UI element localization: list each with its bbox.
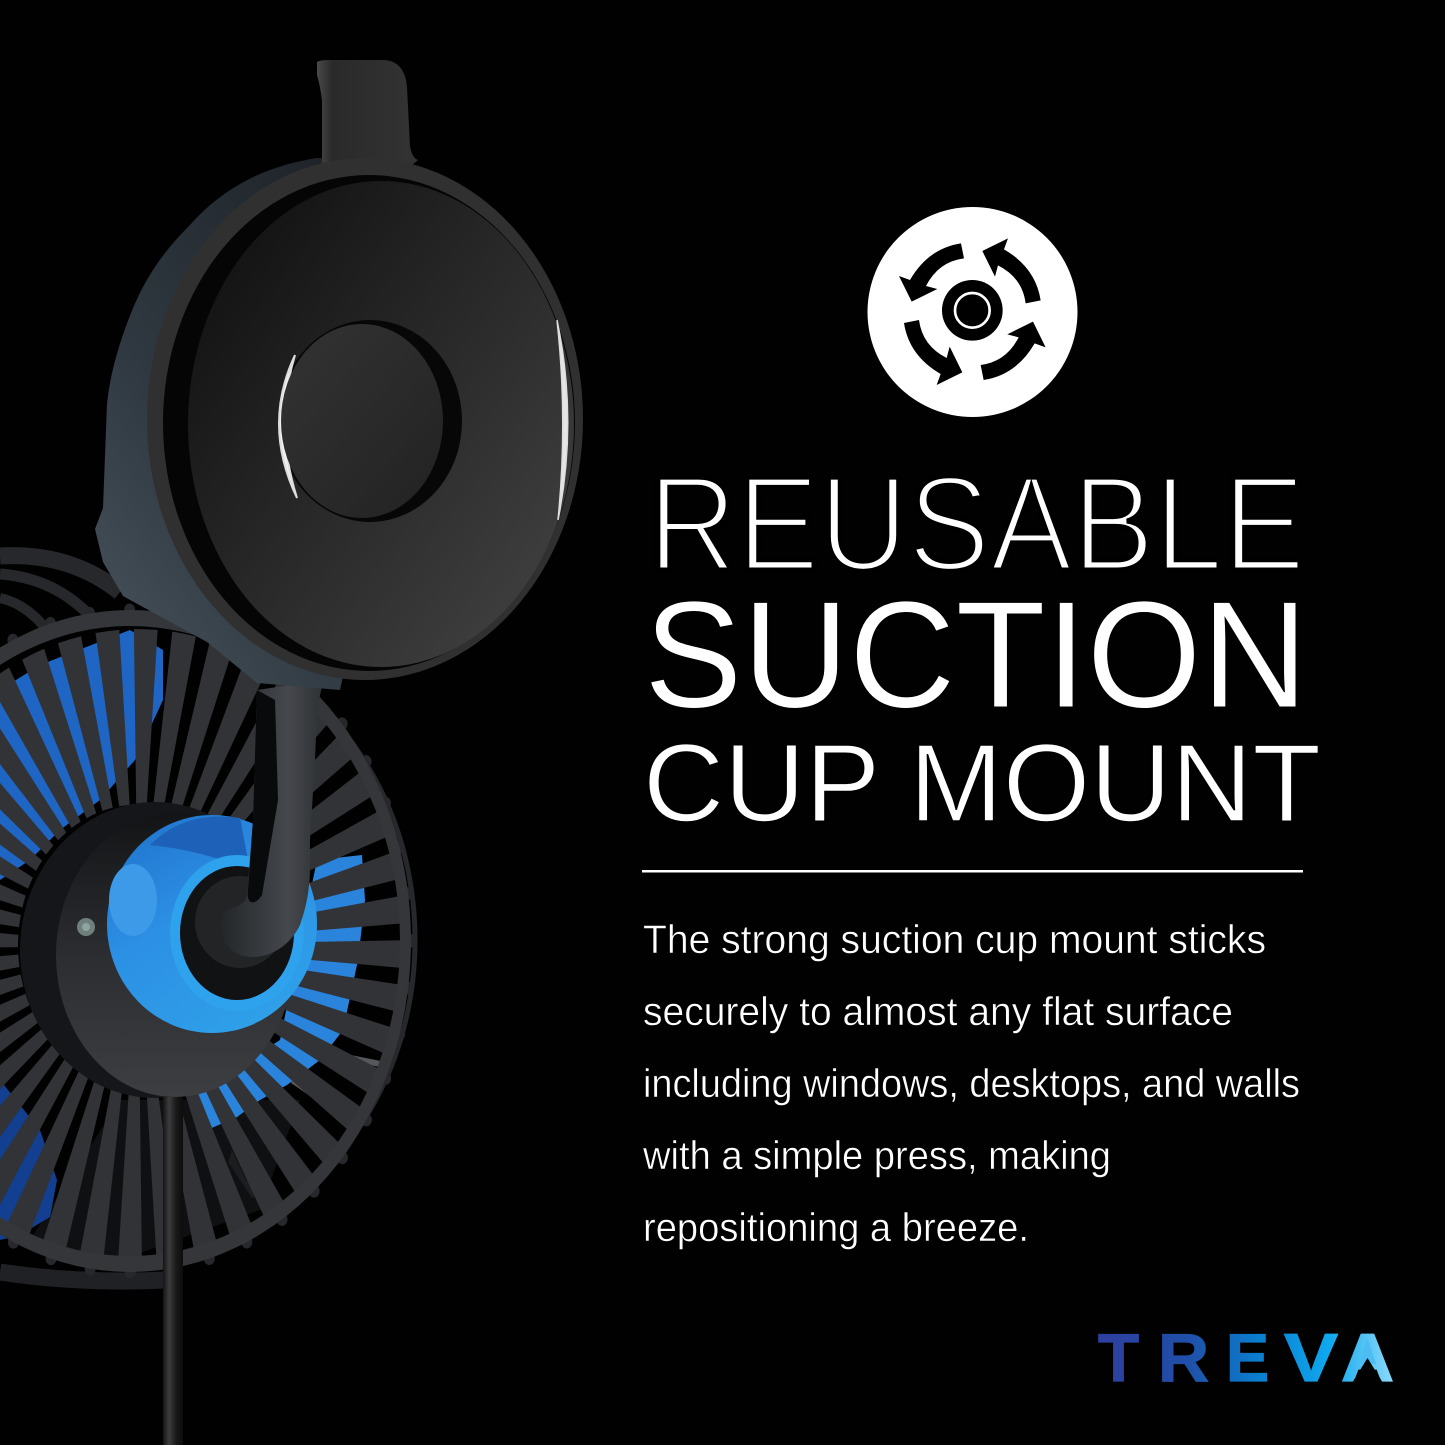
centre button	[281, 324, 443, 518]
fan hub: dark housing	[20, 802, 290, 1098]
logo: TREVA: A	[1341, 1320, 1394, 1396]
logo: TREVA: E	[1226, 1320, 1269, 1396]
hub screw	[77, 918, 95, 936]
suction cup black inner edge	[163, 175, 575, 671]
logo: TREVA: V	[1284, 1320, 1338, 1396]
heading: REUSABLE	[648, 448, 1305, 599]
fan blade: lower left	[0, 1080, 57, 1240]
divider	[642, 870, 1303, 872]
mount arm	[221, 680, 325, 957]
heading: CUP MOUNT	[643, 722, 1321, 845]
logo: TREVA: R	[1158, 1320, 1209, 1396]
fan rear shell	[30, 1100, 300, 1260]
suction cup glossy face	[188, 181, 574, 667]
fan blade: upper left	[0, 630, 163, 880]
product photo: fan with suction cup mount	[0, 60, 583, 1445]
heading: SUCTION	[644, 570, 1308, 740]
logo: TREVA: T	[1098, 1320, 1139, 1396]
suction cup outer rim	[147, 158, 583, 680]
fan guard spokes	[0, 717, 333, 1173]
fan guard outer ring	[0, 610, 411, 1272]
fan blade: right	[195, 855, 365, 1130]
fan hub: textured plate	[56, 813, 294, 1097]
rim highlight	[557, 320, 568, 520]
centre button highlight	[279, 355, 297, 498]
description text: securely to almost any flat surface	[643, 990, 1233, 1034]
description text: The strong suction cup mount sticks	[643, 918, 1266, 962]
suction cup rear housing	[95, 158, 400, 690]
centre button dark crescent	[278, 320, 462, 522]
logo: TREVA	[1098, 1320, 1394, 1396]
description text	[642, 918, 1300, 1250]
blue adjustment knob	[107, 815, 317, 1033]
description text: repositioning a breeze.	[643, 1206, 1029, 1250]
description text: with a simple press, making	[642, 1134, 1111, 1178]
icon: rotating arrows around suction point	[868, 207, 1078, 417]
fan back slats	[228, 794, 394, 1198]
fan guard rim nubs	[0, 610, 411, 1272]
fan guard inner ring	[300, 690, 415, 1190]
fan rear cage	[0, 556, 165, 1281]
description text: including windows, desktops, and walls	[643, 1062, 1300, 1106]
heading	[643, 448, 1321, 845]
suction cup hanging tab	[317, 60, 418, 175]
power cable	[163, 1097, 183, 1445]
